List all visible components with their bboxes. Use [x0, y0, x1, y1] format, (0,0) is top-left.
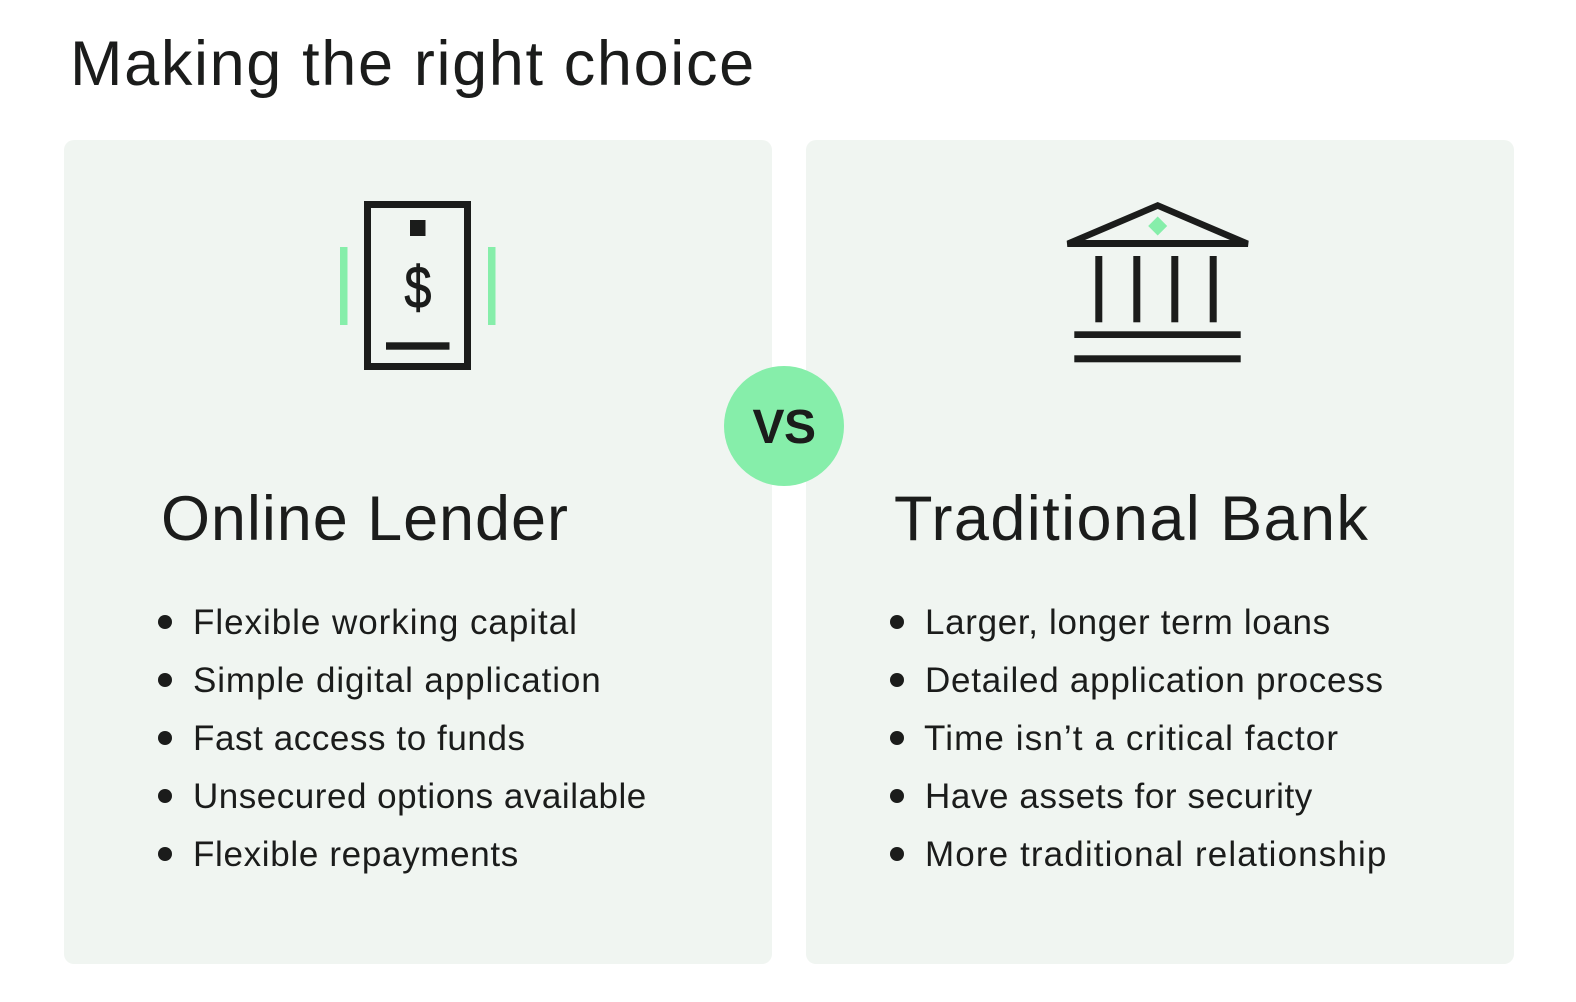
title: Making the right choice — [70, 29, 756, 99]
list: online lender benefits: Flexible repayments — [193, 835, 519, 874]
heading: traditional bank: Traditional Bank — [894, 484, 1369, 554]
list: online lender benefits: Fast access to funds — [193, 719, 526, 758]
list: traditional bank benefits: Have assets for security — [925, 777, 1313, 816]
panel: traditional bank — [806, 140, 1514, 964]
list: online lender benefits: Flexible working capital — [193, 603, 578, 642]
list: traditional bank benefits: Detailed application process — [925, 661, 1384, 700]
icon: bank building — [1066, 202, 1249, 362]
list: traditional bank benefits — [890, 603, 1387, 874]
icon: mobile phone with dollar: $ — [405, 255, 431, 321]
list: online lender benefits: Simple digital application — [193, 661, 602, 700]
vs badge — [724, 366, 844, 486]
heading: online lender: Online Lender — [161, 484, 569, 554]
list: online lender benefits: Unsecured options available — [193, 777, 647, 816]
list: traditional bank benefits: Time isn’t a critical factor — [924, 719, 1339, 758]
icon: mobile phone with dollar — [340, 201, 496, 370]
panel: online lender — [64, 140, 772, 964]
list: traditional bank benefits: Larger, longer term loans — [925, 603, 1331, 642]
list: traditional bank benefits: More traditional relationship — [925, 835, 1387, 874]
vs badge: VS — [752, 401, 816, 454]
list: online lender benefits — [158, 603, 647, 874]
